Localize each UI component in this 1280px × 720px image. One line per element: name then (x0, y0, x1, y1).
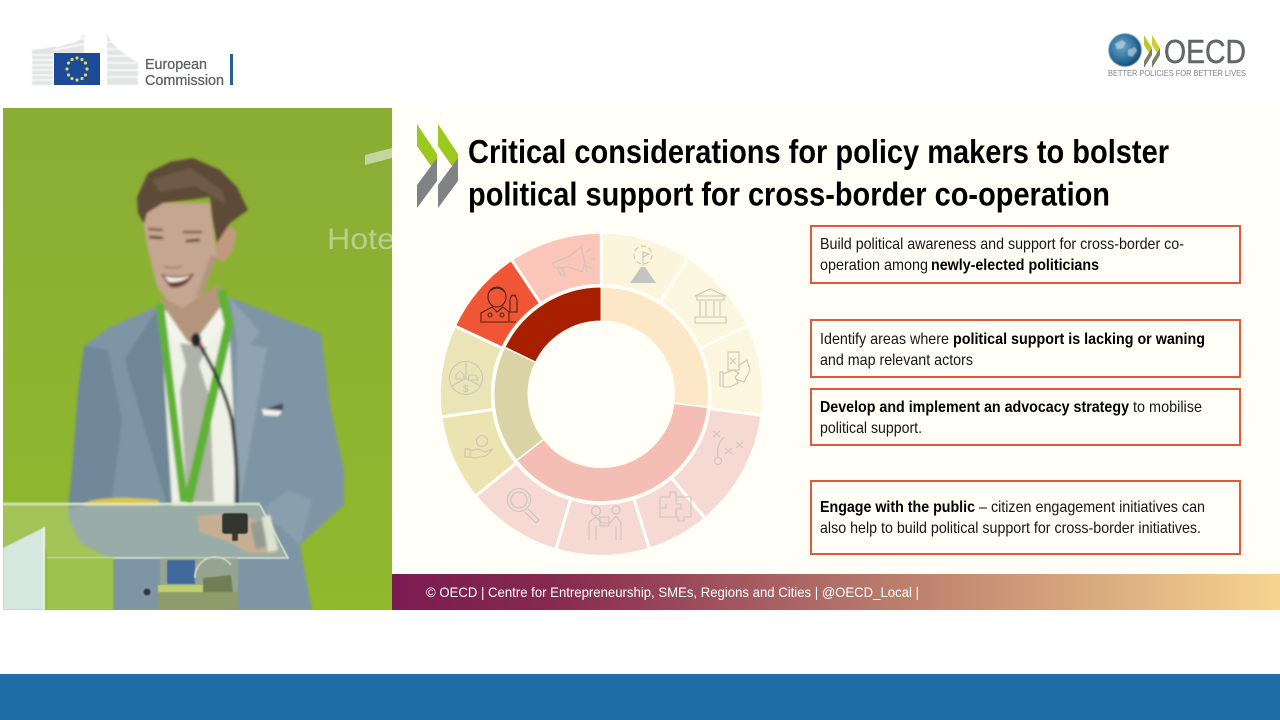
segment: pink 2 (634, 478, 705, 549)
microphone (197, 340, 237, 505)
segment: yellow 3 (700, 326, 763, 415)
title: Critical considerations for policy makers to bolster (468, 133, 1169, 170)
wall signage text: Hote (327, 223, 395, 256)
mouth (161, 273, 194, 287)
right forearm (264, 492, 310, 543)
face (143, 203, 217, 308)
footer bar: © OECD | Centre for Entrepreneurship, SMEs, Regions and Cities | @OECD_Local | (426, 584, 919, 600)
inner segment: olive (494, 347, 544, 460)
segment: light red (511, 232, 601, 304)
callout: engage with the public: also help to build political support for cross-border initiatives. (820, 520, 1201, 537)
icon: puzzle (660, 492, 691, 521)
icon: institution building (695, 289, 726, 323)
icon: title chevrons (417, 124, 458, 208)
tie (180, 343, 214, 502)
device on lectern (83, 498, 160, 505)
logo: OECD (1108, 33, 1246, 78)
chart: segmented donut wheel (439, 232, 763, 556)
hands and watch (197, 513, 277, 553)
icon: megaphone (553, 247, 595, 275)
lectern front lower (47, 558, 113, 610)
callout: political support lacking: and map relevant actors (820, 352, 973, 369)
icon: politician at podium (480, 287, 517, 322)
nose (164, 266, 182, 268)
lectern (3, 504, 288, 610)
photo: speaker at lectern (3, 108, 395, 610)
icon: hand with ballot (720, 352, 750, 387)
icon: magnifier (508, 488, 539, 523)
pocket square (262, 403, 283, 415)
segment: pink 3 (556, 498, 650, 556)
inner segment: pink (517, 403, 708, 502)
callout: engage with the public: – citizen engagement initiatives can (979, 499, 1205, 516)
text: European Commission (145, 57, 224, 89)
lanyard (160, 304, 184, 502)
eyes and brows (148, 229, 202, 232)
text: European Commission: Commission (145, 73, 224, 89)
logo: European Commission (32, 33, 233, 89)
jacket (68, 298, 344, 610)
icon: EU flag (54, 53, 100, 85)
lectern sign (167, 560, 195, 584)
icon: people with box (589, 506, 621, 540)
icon: globe (1108, 34, 1142, 66)
icon: pie with symbols (450, 362, 482, 395)
callout: engage with the public (811, 481, 1240, 554)
segment: pink 1 (671, 408, 762, 518)
callout: political support lacking: Identify areas where (820, 331, 949, 348)
icon: hand with coin (465, 436, 493, 458)
speaker figure (68, 158, 344, 610)
segment: active red (454, 260, 541, 348)
icon: mountain flag (630, 246, 656, 283)
text: OECD wordmark: OECD (1164, 33, 1246, 70)
mic base (222, 513, 248, 534)
inner segment: dark red (505, 287, 601, 362)
lapels (125, 308, 172, 505)
callout: advocacy strategy: to mobilise (1133, 399, 1202, 416)
slide panel background (392, 108, 1280, 574)
collar (162, 306, 224, 340)
segment: yellow 1 (601, 232, 689, 302)
callout: newly-elected politicians: Build political awareness and support for cross-border co- (820, 236, 1184, 253)
hair (137, 158, 248, 243)
callout: advocacy strategy (811, 389, 1240, 445)
chart: inner ring (494, 287, 709, 502)
segment: olive 2 (439, 326, 502, 417)
icon: pie with symbols: $ (463, 384, 469, 395)
footer bar (392, 574, 1280, 610)
bottom blue band (0, 674, 1280, 720)
title: political support for cross-border co-operation (468, 176, 1110, 212)
callout: advocacy strategy: Develop and implement an advocacy strategy (820, 399, 1129, 416)
text: European Commission: European (145, 57, 207, 73)
icon: OECD chevrons (1144, 35, 1160, 68)
callout: political support lacking: political support is lacking or waning (953, 331, 1205, 348)
callout: newly-elected politicians: newly-elected politicians (931, 257, 1099, 274)
shirt (162, 322, 237, 506)
segment: olive 1 (441, 410, 517, 496)
icon: tactics play (713, 431, 743, 464)
callout: engage with the public: Engage with the public (820, 499, 975, 516)
title (468, 133, 1169, 212)
icon: Berlaymont building (32, 33, 138, 85)
callout: political support lacking (811, 320, 1240, 377)
callout: advocacy strategy: political support. (820, 420, 922, 437)
inner segment: beige (601, 287, 709, 407)
segment: yellow 2 (660, 258, 748, 348)
wall signage text (330, 148, 392, 250)
callout: newly-elected politicians: operation among (820, 257, 928, 274)
ear (216, 226, 237, 262)
lectern side panel (3, 528, 43, 610)
lectern top plate (3, 505, 288, 558)
text: OECD tagline: BETTER POLICIES FOR BETTER LIVES (1108, 68, 1246, 78)
segment: pink 4 (475, 463, 571, 550)
callout: newly-elected politicians (811, 226, 1240, 283)
neck (161, 285, 222, 343)
